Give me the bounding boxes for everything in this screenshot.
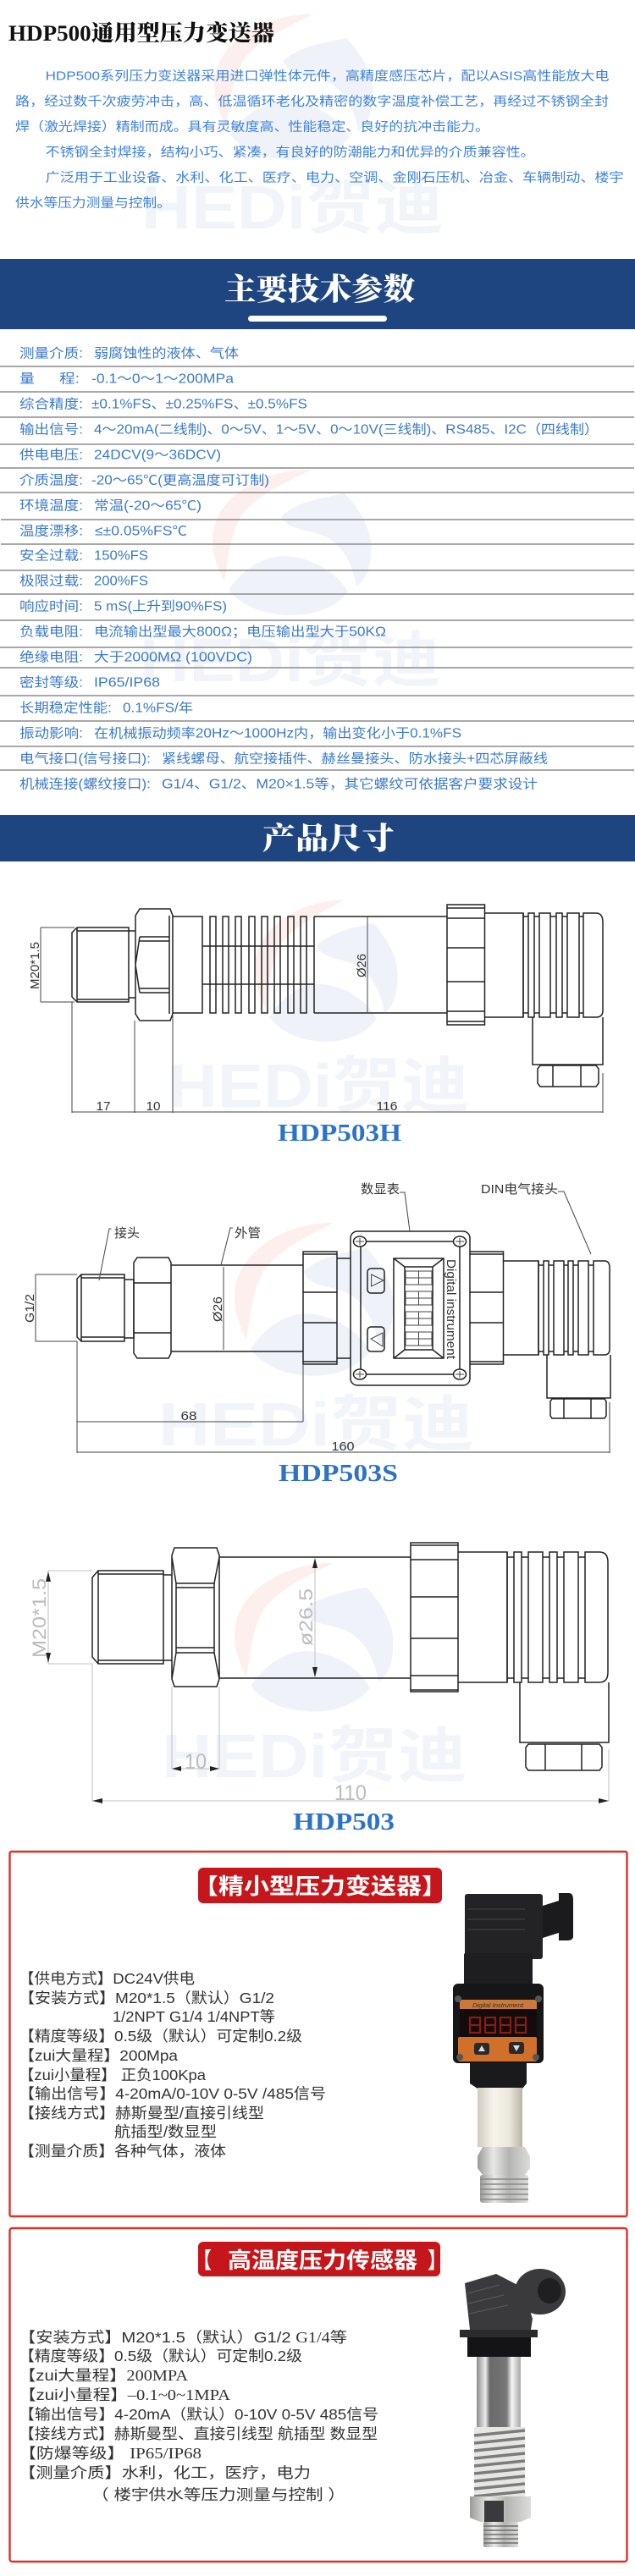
row: medium: 弱腐蚀性的液体、气体 — [94, 345, 240, 361]
intro text block — [15, 69, 624, 210]
row: stability: 0.1%FS/年 — [123, 701, 193, 716]
row: limit overload: 200%FS — [94, 574, 148, 589]
row: medium temperature: -20～65℃(更高温度可订制) — [91, 472, 269, 487]
drawing: HDP503 — [29, 1543, 609, 1805]
spec list: 【zui大量程】200Mpa — [19, 2047, 178, 2064]
spec list: 【测量介质】各种气体，液体 — [19, 2143, 227, 2160]
icon: seven segment digits — [406, 1271, 432, 1346]
panel: high temperature pressure sensor — [10, 2228, 627, 2562]
intro text block: 路，经过数千次疲劳冲击，高、低温循环老化及精密的数字温度补偿工艺，再经过不锈钢全封 — [15, 93, 609, 108]
row: output: 输出信号: — [19, 421, 83, 437]
thread label: M20*1.5 — [29, 1578, 50, 1658]
spec list: 【zui小量程】 正负100Kpa — [19, 2067, 206, 2083]
row: mechanical — [19, 777, 538, 792]
drawing: HDP503S — [23, 1182, 610, 1454]
thread label: M20*1.5 — [28, 942, 42, 989]
row: supply — [19, 447, 221, 462]
spec list: 【供电方式】DC24V供电 — [19, 1970, 195, 1987]
section banner: product dimensions: 产品尺寸 — [262, 815, 395, 858]
row: vibration: 振动影响: — [19, 726, 83, 741]
spec list: 【输出信号】4-20mA/0-10V 0-5V /485信号 — [19, 2085, 326, 2102]
spec list: 【测量介质】水利，化工，医疗，电力 — [19, 2464, 311, 2481]
row: medium temperature — [19, 472, 269, 487]
row: accuracy: ±0.1%FS、±0.25%FS、±0.5%FS — [91, 398, 307, 411]
row: accuracy: 综合精度: — [19, 396, 83, 411]
panel heading — [193, 2242, 446, 2276]
row: limit overload — [19, 574, 148, 589]
callout: DIN connector: DIN电气接头 — [481, 1182, 558, 1197]
row: safe overload: 安全过载: — [19, 548, 83, 564]
dimension label: 110 — [334, 1781, 367, 1805]
spec list: 【接线方式】赫斯曼型、直接引线型 航插型 数显型 — [19, 2425, 378, 2442]
row: output: 4～20mA(二线制)、0～5V、1～5V、0～10V(三线制)、RS485、I2C（四线制） — [94, 421, 599, 437]
spec list: 【zui小量程】 –0.1~0~1MPA — [19, 2386, 230, 2403]
watermark: specs — [140, 470, 441, 695]
watermark: drawing HDP503S — [158, 1223, 474, 1459]
row: load: 电流输出型最大800Ω；电压输出型大于50KΩ — [94, 625, 386, 640]
row: load: 负载电阻: — [19, 625, 83, 640]
row: drift — [19, 523, 187, 538]
watermark: specs: HEDi贺迪 — [140, 627, 441, 695]
dimension label: 68 — [181, 1409, 196, 1423]
spec list: 【安装方式】M20*1.5（默认）G1/2 G1/4 等 — [19, 2329, 347, 2346]
model label: HDP503: HDP503 — [293, 1808, 395, 1836]
dimension label: 10 — [185, 1750, 207, 1774]
spec list: 【精度等级】0.5级（默认）可定制0.2级 — [19, 2348, 302, 2364]
spec list: （ 楼宇供水等压力测量与控制 ） — [91, 2486, 345, 2503]
spec list — [19, 2329, 378, 2503]
drawing: HDP503H — [28, 905, 603, 1114]
dimension arrows — [46, 1558, 609, 1803]
callout: tube: 外管 — [235, 1226, 261, 1241]
spec list: 【精度等级】0.5级（默认）可定制0.2级 — [19, 2028, 302, 2045]
intro text block: HDP500系列压力变送器采用进口弹性体元件，高精度感压芯片，配以ASIS高性能放大电 — [46, 69, 610, 83]
row: electrical: 电气接口(信号接口): — [19, 751, 151, 767]
row: insulation: 绝缘电阻: — [19, 650, 83, 665]
panel heading: 【 — [193, 2248, 212, 2273]
row: medium temperature: 介质温度: — [19, 472, 83, 487]
row: load — [19, 625, 386, 640]
row: range: -0.1～0～1～200MPa — [91, 372, 234, 386]
watermark: drawing HDP503H — [168, 900, 470, 1120]
row: ambient temperature: 环境温度: — [19, 498, 83, 513]
row: sealing — [19, 675, 160, 691]
row: range: 程: — [59, 371, 80, 386]
dimension label: 17 — [97, 1099, 110, 1114]
dimension label: 116 — [376, 1099, 398, 1114]
row: mechanical: 机械连接(螺纹接口): — [19, 777, 151, 792]
row: insulation: 大于2000MΩ (100VDC) — [94, 650, 252, 665]
intro text block: 供水等压力测量与控制。 — [15, 195, 171, 210]
icon: down button — [367, 1327, 384, 1351]
section banner: product dimensions — [0, 815, 635, 861]
thread label: G1/2 — [23, 1294, 37, 1323]
diameter label: ø26.5 — [295, 1588, 317, 1646]
row: vibration: 在机械振动频率20Hz～1000Hz内，输出变化小于0.1%FS — [94, 726, 461, 741]
spec list — [19, 1970, 326, 2160]
spec list: 1/2NPT G1/4 1/4NPT等 — [113, 2008, 275, 2025]
panel heading: 】 — [428, 2248, 446, 2273]
model label: HDP503S: HDP503S — [279, 1460, 398, 1487]
row: electrical: 紧线螺母、航空接插件、赫丝曼接头、防水接头+四芯屏蔽线 — [162, 751, 548, 767]
spec list: 【zui大量程】 200MPA — [19, 2367, 188, 2384]
row: range: 量 — [19, 372, 35, 386]
row: supply: 供电电压: — [19, 447, 83, 462]
panel heading: 高温度压力传感器 — [228, 2248, 417, 2273]
icon: screws — [354, 1236, 466, 1379]
dimension label: 10 — [146, 1099, 161, 1114]
row: drift: ≤±0.05%FS℃ — [95, 525, 187, 538]
spec list: 【安装方式】M20*1.5（默认）G1/2 — [19, 1990, 274, 2006]
spec list: 【输出信号】4-20mA（默认）0-10V 0-5V 485信号 — [19, 2406, 378, 2423]
row: response: 5 mS(上升到90%FS) — [94, 599, 227, 614]
row: mechanical: G1/4、G1/2、M20×1.5等，其它螺纹可依据客户要求设计 — [162, 777, 538, 792]
title: HDP500通用型压力变送器 — [8, 20, 274, 46]
watermark: intro: HEDi贺迪 — [141, 174, 444, 242]
spec list: 航插型/数显型 — [114, 2123, 217, 2140]
watermark: drawing HDP503H: HEDi贺迪 — [168, 1053, 470, 1120]
diameter label: Ø26 — [211, 1296, 225, 1322]
row: safe overload: 150%FS — [94, 548, 148, 564]
diameter label: Ø26 — [355, 954, 369, 977]
panel heading — [193, 1868, 447, 1903]
row: stability — [19, 701, 193, 716]
product photo: transmitter with display — [453, 1893, 573, 2203]
row: response — [19, 597, 227, 614]
row: accuracy — [19, 396, 307, 411]
dimension label: 160 — [332, 1439, 354, 1454]
spec list: 【接线方式】赫斯曼型/直接引线型 — [19, 2105, 264, 2122]
row: electrical — [19, 751, 548, 767]
row: sealing: 密封等级: — [19, 675, 83, 691]
watermark: intro — [141, 14, 444, 242]
spec table — [0, 345, 634, 792]
product label: Digital Instrument — [472, 2001, 524, 2009]
row: ambient temperature: 常温(-20～65℃) — [94, 498, 202, 513]
callout: connector: 接头 — [114, 1226, 140, 1241]
row: stability: 长期稳定性能: — [19, 701, 112, 716]
panel heading: 【精小型压力变送器】 — [193, 1874, 447, 1899]
spec list: 【防爆等级】 IP65/IP68 — [19, 2445, 202, 2462]
intro text block: 广泛用于工业设备、水利、化工、医疗、电力、空调、金刚石压机、冶金、车辆制动、楼宇 — [46, 171, 624, 184]
model label: HDP503H: HDP503H — [278, 1120, 401, 1147]
callout: digital meter: 数显表 — [361, 1182, 400, 1197]
row: sealing: IP65/IP68 — [94, 675, 160, 691]
row: insulation — [19, 650, 252, 665]
display digits — [470, 2017, 526, 2033]
row: drift: 温度漂移: — [19, 523, 83, 538]
intro text block: 焊（激光焊接）精制而成。具有灵敏度高、性能稳定、良好的抗冲击能力。 — [15, 120, 489, 134]
instrument label: Digital instrument — [444, 1259, 458, 1360]
row: medium — [19, 345, 240, 361]
row: medium: 测量介质: — [19, 345, 83, 361]
watermark: drawing HDP503S: HEDi贺迪 — [158, 1391, 474, 1459]
panel: compact pressure transmitter — [10, 1852, 627, 2216]
row: limit overload: 极限过载: — [19, 574, 83, 589]
section banner: main technical parameters: 主要技术参数 — [224, 266, 415, 309]
row: response: 响应时间: — [19, 597, 83, 614]
section banner: main technical parameters — [0, 259, 635, 329]
row: range — [19, 371, 234, 386]
watermark: drawing HDP503 — [162, 1563, 467, 1791]
row: safe overload — [19, 548, 148, 564]
intro text block: 不锈钢全封焊接，结构小巧、紧凑，有良好的防潮能力和优异的介质兼容性。 — [46, 144, 535, 159]
watermark: drawing HDP503: HEDi贺迪 — [162, 1723, 467, 1791]
row: supply: 24DCV(9～36DCV) — [94, 449, 221, 462]
product photo: high temperature sensor — [460, 2269, 566, 2547]
row: ambient temperature — [19, 498, 202, 513]
icon: up button — [367, 1269, 384, 1293]
